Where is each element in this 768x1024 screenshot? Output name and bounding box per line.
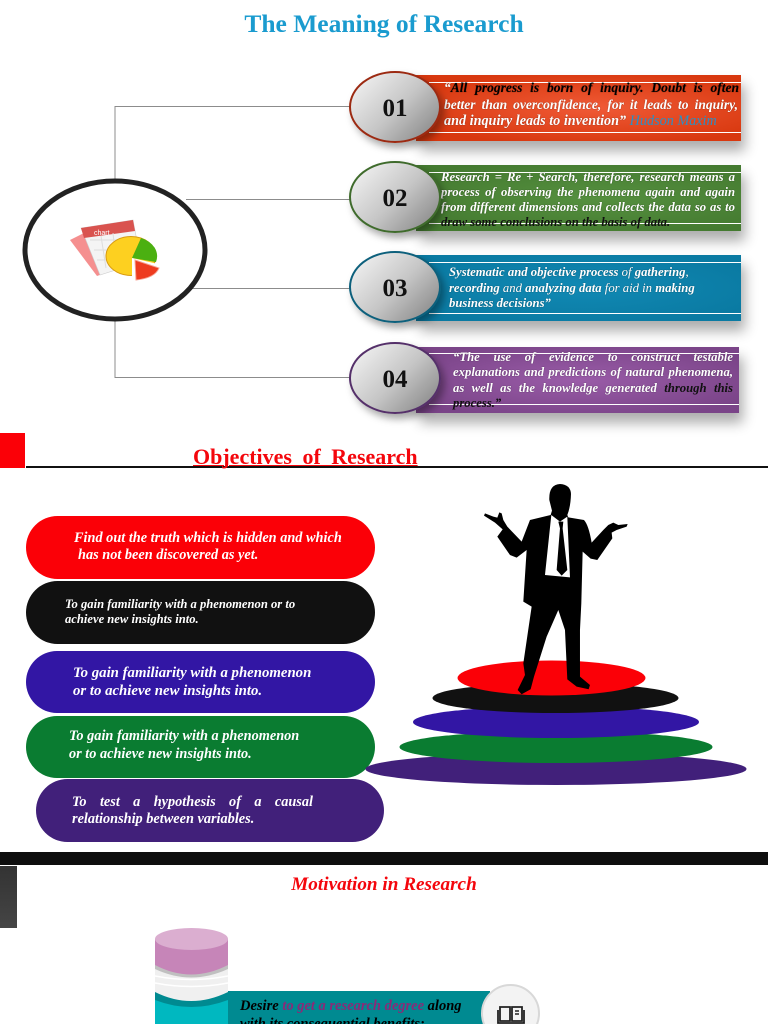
teal band text: Desire to get a research degree along: [240, 998, 462, 1014]
central ellipse with chart icon: chart: [94, 230, 110, 237]
badge 01: [349, 71, 441, 143]
banner 02 text: from different dimensions and collects the data so as to: [441, 200, 735, 214]
banner 04 text: explanations and predictions of natural phenomena,: [453, 365, 733, 379]
cylinder column: [155, 928, 228, 1024]
pill: objective 3: To gain familiarity with a phenomenon: [73, 665, 311, 681]
pill: objective 1: has not been discovered as yet.: [78, 547, 258, 563]
pill: objective 4: or to achieve new insights into.: [69, 746, 252, 762]
banner 02 text: process of observing the phenomena again and again: [441, 185, 735, 199]
pill: objective 1: [26, 516, 375, 579]
icon: open book in circle: [481, 984, 540, 1024]
banner 03 rules: [429, 262, 741, 314]
banner 02 text: Research = Re + Search, therefore, research means a: [441, 170, 735, 184]
banner 04 rules: [429, 353, 739, 405]
teal band: [228, 991, 490, 1024]
section band: [0, 852, 768, 865]
banner 03 text: [448, 265, 695, 310]
banner 03 text: recording and analyzing data for aid in making: [449, 281, 695, 295]
teal band text: [240, 998, 462, 1024]
pill: objective 3: or to achieve new insights into.: [73, 683, 262, 699]
badge 01: 01: [382, 95, 408, 122]
pill: objective 2: achieve new insights into.: [65, 612, 199, 626]
pill: objective 1: Find out the truth which is hidden and which: [74, 530, 342, 546]
banner 02: [416, 165, 741, 231]
banner 02 text: draw some conclusions on the basis of data.: [441, 215, 670, 229]
pill: objective 4: To gain familiarity with a phenomenon: [69, 728, 299, 744]
badge 02: 02: [382, 185, 408, 212]
banner 03 text: business decisions”: [449, 296, 551, 310]
section rule: [26, 466, 768, 468]
badge 04: [349, 342, 441, 414]
section marker: grey block: [0, 866, 17, 928]
banner 04 text: “The use of evidence to construct testable: [453, 350, 733, 364]
banner 01 text: [444, 80, 739, 129]
banner 02 rules: [429, 172, 741, 224]
title: The Meaning of Research: [244, 9, 524, 38]
badge 02: [349, 161, 441, 233]
heading: motivation: Motivation in Research: [291, 874, 477, 895]
banner 03 text: Systematic and objective process of gathering,: [449, 265, 689, 279]
banner 04 text: as well as the knowledge generated through this: [453, 381, 733, 395]
heading: objectives: Objectives of Research: [193, 444, 418, 469]
pill: objective 5: relationship between variables.: [72, 811, 254, 827]
banner 04 text: process.”: [453, 396, 501, 410]
banner 01: [416, 75, 741, 141]
badge 03: [349, 251, 441, 323]
banner 04: [416, 347, 739, 413]
banner 01 text: better than overconfidence, for it leads to inquiry,: [444, 97, 738, 112]
podium with silhouette figure: [366, 484, 746, 785]
banner 02 text: [440, 170, 735, 229]
banner 03: [416, 255, 741, 321]
banner 01 text: “All progress is born of inquiry. Doubt is often: [444, 80, 739, 95]
badge 03: 03: [382, 275, 408, 302]
pill: objective 2: [26, 581, 375, 644]
badge 04: 04: [382, 366, 408, 393]
pill: objective 5: To test a hypothesis of a causal: [72, 794, 313, 810]
pill: objective 4: [26, 716, 375, 778]
pill: objective 5: [36, 779, 384, 842]
section marker: red square: [0, 433, 25, 468]
connector lines: [114, 106, 350, 378]
pill: objective 3: [26, 651, 375, 713]
central ellipse with chart icon: [22, 178, 208, 322]
banner 01 rules: [429, 82, 741, 133]
banner 01 text: and inquiry leads to invention” Hudson Maxim: [444, 113, 717, 129]
banner 04 text: [452, 350, 733, 410]
pill: objective 2: To gain familiarity with a phenomenon or to: [65, 597, 295, 611]
